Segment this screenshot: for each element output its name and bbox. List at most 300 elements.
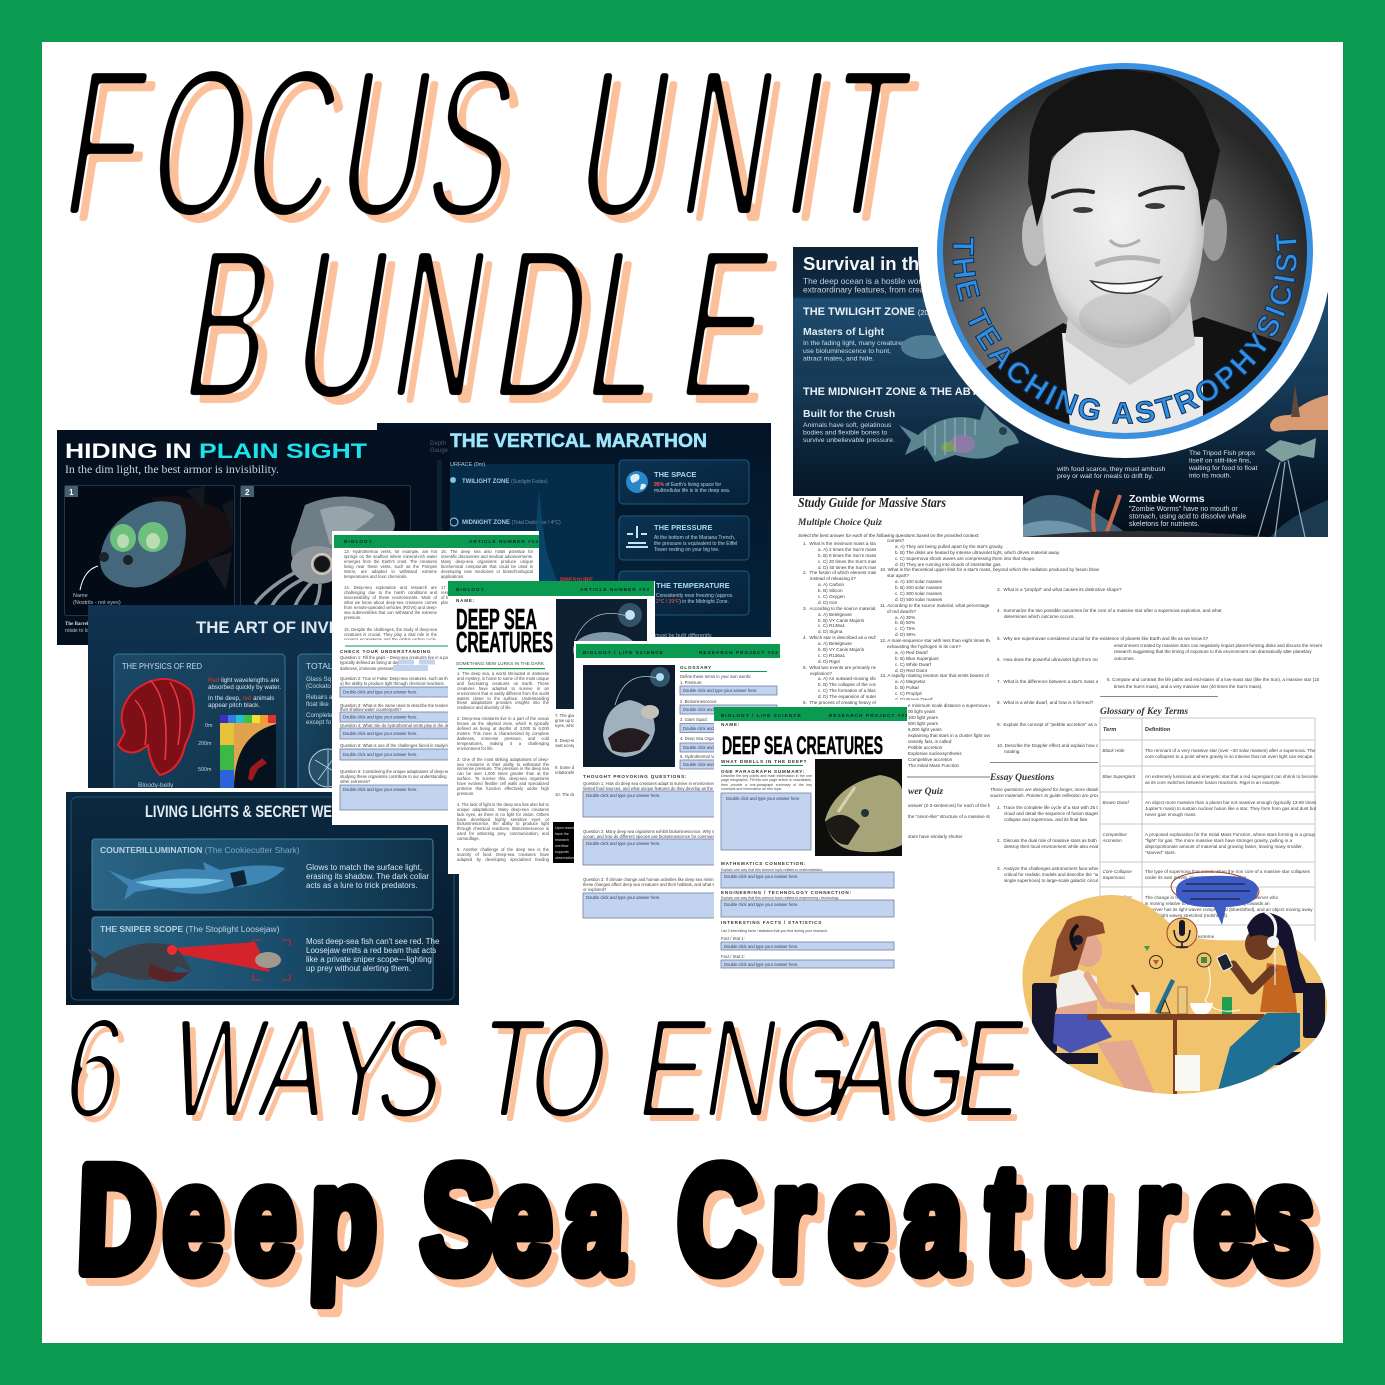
speech bubble	[1170, 869, 1260, 925]
article paragraphs: 3. One of the most striking adaptations of deep-sea creatures is their ability to withstand the immense pressure. The pressure in the deep sea can be over 1,000 times greater than at the surface. To survive this, deep-sea organisms have evolved flexible cell walls and specialized proteins that function effectively under high pressure.	[457, 757, 549, 796]
multiple choice column 2: d. D) 500 solar masses	[895, 597, 942, 602]
connection sections: Double click and type your answer here.	[724, 902, 798, 907]
physics text: In the deep, red animals	[208, 695, 274, 702]
article paragraphs: 1. The deep sea, a world shrouded in darkness and mystery, is home to some of the most unique and fascinating creatures on Earth. These creatures have adapted to survive in an environment that is vastly different from the sunlit waters closer to the surface. Understanding these adaptations provides insights into the resilience and diversity of life.	[457, 672, 549, 710]
glossary table: Supernova	[1102, 875, 1125, 880]
quiz answers continuation: Explosive nucleosynthesis	[908, 751, 962, 756]
depth absorption chart: 0m	[205, 723, 213, 729]
multiple choice column 1: d. D) Sigma	[818, 629, 842, 634]
shirt	[1062, 333, 1203, 440]
short answer questions: 9. Explain the concept of "pebble accretion" as a n	[997, 722, 1101, 727]
second column peek: 10. The deep	[555, 792, 580, 797]
second column peek: 7. The giant squid	[555, 713, 589, 718]
multiple choice column 2: comets?	[887, 538, 904, 543]
twilight zone section: attract mates, and hide.	[803, 356, 874, 362]
essay questions: Essay Questions	[990, 773, 1054, 783]
document page: research project with glossary: BIOLOGY / LIFE SCIENCE	[583, 650, 664, 655]
summary instructions: Describe the key points and main information in the one page infographic. Fill this one page article is unavailable, then provide a one-paragraph summary of the key concepts and information on this topic.	[721, 774, 812, 791]
glossary: 3. Giant Squid:	[680, 717, 708, 722]
heading: deep sea creatures: Deep Sea Creatures	[75, 1140, 1317, 1303]
second column peek: 9. Some deep	[555, 765, 582, 770]
marathon title: THE VERTICAL MARATHON	[450, 431, 707, 452]
icon: green heart	[1144, 946, 1150, 951]
glossary: 1. Pressure:	[680, 680, 703, 685]
essay questions: destroy their local environment while also enabli	[1004, 844, 1102, 849]
article paragraphs: 4. The lack of light in the deep sea has also led to unique adaptations. Many deep-sea creatures lack eyes, as there is no light for vision. Others have developed highly sensitive eyes or bioluminescence, the ability to produce light through chemical reactions. Bioluminescence is used for attracting prey, communication, and camouflage.	[457, 802, 549, 841]
eyes	[1073, 207, 1093, 213]
multiple choice column 2: d. D) Brown Dwarf	[895, 697, 933, 702]
essay questions 4 and 5: environment created by massive stars can negatively impact planet-forming disks and discuss the recent	[1114, 643, 1323, 648]
connection sections: INTERESTING FACTS / STATISTICS	[721, 920, 822, 925]
image card 1: barreleye fish	[64, 486, 234, 616]
multiple choice column 2: c. C) Proplyd	[895, 691, 922, 696]
fact card: the temperature	[619, 571, 749, 615]
neck	[1065, 300, 1195, 385]
multiple choice column 2: b. B) 50%	[895, 620, 915, 625]
multiple choice column 1: a. A) Betelgeuse	[818, 612, 852, 617]
glossary table: The type of supernova that occurs when the iron core of a massive star collapses	[1145, 869, 1311, 874]
multiple choice column 1: 1. What is the minimum mass a star	[803, 541, 876, 546]
hand with eiffel tower	[1270, 385, 1328, 432]
document page: research project what dwells in the deep: ONE PARAGRAPH SUMMARY:	[721, 769, 805, 774]
check your understanding questions: Question 4: What role do hydrothermal vents play in the deep sea?	[340, 723, 465, 728]
second column peek: 8. Deep-sea	[555, 738, 578, 743]
document page: article with title deep sea creatures: overflow	[555, 844, 569, 848]
yellow blob	[1022, 895, 1327, 1094]
document page: study guide continuation: the "onion-like" structure of a massive star	[908, 814, 994, 819]
zone labels: URFACE (0m)	[450, 462, 485, 468]
zone labels	[450, 462, 561, 526]
connection sections: ENGINEERING / TECHNOLOGY CONNECTION:	[721, 890, 852, 895]
short answer questions	[997, 587, 1222, 754]
check your understanding questions: Double click and type your answer here.	[343, 714, 417, 720]
document page: research project what dwells in the deep: RESEARCH PROJECT #03	[829, 713, 907, 718]
document page: article with title deep sea creatures: NAME:	[456, 598, 475, 603]
table	[1087, 1014, 1265, 1020]
depth gauge label	[430, 441, 449, 454]
fact card: the space: 95% of Earth's living space for	[654, 482, 721, 488]
glossary table: under its own gravity, triggering a titanic explosion.	[1145, 875, 1248, 880]
card: counterillumination: Glows to match the surface light,	[306, 863, 422, 872]
multiple choice column 1: a. A) Carbon	[818, 582, 844, 587]
essay questions	[989, 773, 1103, 883]
document page: article with title deep sea creatures: BIOLOGY	[456, 587, 485, 592]
slide subtitle: In the dim light, the best armor is invisibility.	[65, 462, 279, 476]
fact card: the pressure: At the bottom of the Mariana Trench,	[654, 535, 735, 541]
thought provoking questions: THOUGHT PROVOKING QUESTIONS:	[583, 774, 687, 779]
multiple choice column 2: 13. A rapidly rotating neutron star that emits beams of X	[880, 673, 993, 678]
document page: study guide multiple choice: Multiple Choice Quiz	[797, 518, 882, 528]
loosejaw fish	[87, 943, 192, 980]
essay questions 4 and 5: research suggesting that the timing of exposure to this environment can dramatically alter planetary	[1114, 649, 1312, 654]
card: the sniper scope: THE SNIPER SCOPE (The Stoplight Loosejaw)	[100, 924, 280, 934]
check your understanding questions: Double click and type your answer here.	[343, 690, 417, 694]
multiple choice column 1: b. B) VY Canis Majoris	[818, 647, 864, 652]
second column peek: relationships	[555, 770, 579, 775]
zombie worms and whale scene: Zombie Worms	[1129, 493, 1205, 505]
short answer questions: 4. Summarize the two possible outcomes for the core of a massive star after a supernova explosion, and what	[997, 608, 1222, 613]
thought provoking questions: or explored?	[583, 887, 607, 892]
document page: research project what dwells in the deep: BIOLOGY / LIFE SCIENCE	[721, 713, 802, 718]
document page: article with title deep sea creatures: have the	[555, 832, 569, 836]
panel: the art of invisibility slide	[88, 605, 348, 788]
worksheet title	[456, 604, 553, 659]
glossary: Double click and	[683, 762, 714, 767]
card: counterillumination: COUNTERILLUMINATION (The Cookiecutter Shark)	[100, 845, 300, 855]
multiple choice column 2: c. C) 300 solar masses	[895, 591, 942, 596]
quiz answers continuation: 6,000 light years	[908, 727, 942, 732]
multiple choice column 1: a. A) An outward-moving shc	[818, 676, 876, 681]
multiple choice column 1: b. B) VY Canis Majoris	[818, 618, 864, 623]
card: total transparency: float like	[306, 701, 329, 708]
multiple choice column 1: c. C) R136a1	[818, 623, 845, 628]
chairs	[1032, 983, 1057, 1053]
essay questions: cloud and detail the sequence of fusion stages	[1004, 811, 1099, 816]
card: total transparency: except fo	[306, 719, 332, 726]
document page: article page with check your understanding: ARTICLE NUMBER #03	[469, 539, 539, 544]
glossary: Define these terms in your own words:	[680, 674, 751, 679]
multiple choice column 2: b. B) The disks are heated by intense ultraviolet light, which drives material away.	[895, 550, 1060, 555]
deep sea fish photo	[815, 759, 902, 856]
ears	[1022, 204, 1046, 266]
card: total transparency: TOTAL	[306, 661, 333, 671]
short answer questions: 8. What is a white dwarf, and how is it formed?	[997, 700, 1094, 705]
icon: podcast mic	[1167, 918, 1197, 948]
thought provoking questions: Question 2: Many deep sea organisms exhibit bioluminescence. Why might creatures	[583, 829, 741, 834]
connection sections: Fact / Stat 1:	[721, 936, 745, 941]
multiple choice column 2: b. B) 200 solar masses	[895, 585, 942, 590]
slide title: LIVING LIGHTS & SECRET WE	[145, 803, 332, 821]
glossary table: Core-Collapse	[1102, 869, 1132, 874]
woman right upper body	[1217, 912, 1310, 1013]
article paragraphs: 2. Deep-sea creatures live in a part of the ocean known as the abyssal zone, which is typically defined as being at depths of 3,000 to 6,000 meters. This zone is characterized by complete darkness, immense pressure, and cold temperatures, making it a challenging environment for life.	[457, 716, 549, 751]
fact card: the pressure: THE PRESSURE	[654, 523, 712, 532]
fact card: the pressure: the pressure is equivalent to the Eiffel	[654, 541, 737, 547]
zombie worms and whale scene: skeletons for nutrients.	[1129, 521, 1199, 528]
essay questions 4 and 5	[1107, 643, 1323, 689]
connection sections: Fact / Stat 2:	[721, 954, 745, 959]
zombie worms and whale scene: "Zombie Worms" have no mouth or	[1129, 506, 1238, 513]
physics text	[208, 677, 281, 709]
fact card: the temperature: THE TEMPERATURE	[656, 581, 730, 590]
connection sections: Double click and type your answer here.	[724, 962, 798, 967]
multiple choice column 2: a. A) Magnetar	[895, 679, 925, 684]
multiple choice column 2: star apart?	[887, 573, 909, 578]
worksheet title: CREATURES	[456, 627, 553, 659]
short answer questions: determines which outcome occurs.	[1004, 614, 1075, 619]
essay questions: 3. Analyze the challenges astronomers face when	[997, 866, 1100, 871]
tripod fish	[1188, 438, 1316, 537]
glossary	[680, 665, 777, 769]
fact card: the space	[619, 460, 749, 504]
twilight zone section: THE TWILIGHT ZONE (200 – 1000m)	[803, 306, 967, 318]
fact card: the space: THE SPACE	[654, 470, 696, 479]
depth absorption chart	[198, 715, 276, 788]
glossary table: Definition	[1145, 727, 1171, 733]
quiz answers continuation: 00 light years	[908, 709, 936, 714]
thought provoking questions: Question 3: If climate change and human activities like deep sea mining continue to	[583, 877, 738, 882]
twilight zone section	[803, 306, 967, 362]
glossary table: A proposed explanation for the Initial Mass Function, where stars forming in a group	[1145, 832, 1316, 837]
jacket	[986, 317, 1282, 433]
glossary table: Term	[1103, 727, 1116, 733]
glossary table: Accretion	[1102, 838, 1122, 843]
card: total transparency: (Cockato	[306, 683, 331, 690]
short answer questions: 7. What is the difference between a star's mass an	[997, 679, 1101, 684]
glossary table: Brown Dwarf	[1102, 800, 1130, 805]
multiple choice column 1: c. C) Oxygen	[818, 594, 845, 599]
short answer questions: 3. What is a "proplyd" and what causes its distinctive shape?	[997, 587, 1122, 592]
glossary table: observer has its light waves compressed (blueshifted), and an object moving away	[1145, 907, 1313, 912]
essay questions 4 and 5: times the Sun's mass), and a very massive star (40 times the Sun's mass).	[1114, 684, 1263, 689]
glossary table: Black Hole	[1102, 748, 1125, 753]
smile	[1091, 277, 1161, 293]
zombie worms and whale scene: stomach, using acid to dissolve whale	[1129, 514, 1246, 520]
second column peek: grow up to 43 feet	[555, 718, 589, 723]
shopping bag	[1175, 1055, 1200, 1091]
check your understanding questions: studying these organisms contribute to our understanding of life in the	[340, 774, 470, 779]
quiz answers continuation: 600 light years	[908, 721, 939, 726]
multiple choice column 2: exhausting the hydrogen in its core?	[887, 644, 961, 649]
card: the sniper scope: like a private sniper scope—lighting	[306, 955, 432, 964]
shark	[108, 862, 285, 900]
document page: research project what dwells in the deep	[714, 707, 907, 968]
quiz answers continuation: onsistly fast, is called:	[908, 739, 952, 744]
glossary: Double click and	[683, 745, 714, 750]
worksheet title: DEEP SEA	[456, 604, 537, 636]
fact card: the temperature: 2°C / 39°F) in the Midnight Zone.	[656, 599, 729, 605]
quiz answers continuation: Pebble accretion	[908, 745, 943, 750]
article column 2: 17. The deep sea is also important for scientific research and helps us understand the evolution of life, the limits of survival and the health of the planet.	[441, 585, 533, 605]
multiple choice column 2: 12. A main-sequence star with less than eight times the	[880, 638, 992, 643]
midnight zone section: bodies and flexible bones to	[803, 430, 887, 436]
thought provoking questions: ocean, and how do different species use bioluminescence for communication, hunting	[583, 834, 742, 839]
multiple choice column 1: d. D) Iron	[818, 600, 837, 605]
panel: survival in the deep slide: The deep ocean is a hostile world	[803, 276, 928, 286]
depth absorption chart: 500m	[198, 767, 212, 773]
fact card: the pressure: Tower resting on your big toe.	[654, 547, 720, 553]
glossary table: as its core switches between fusion reactions. Rigel is an example.	[1145, 780, 1281, 785]
thought provoking questions: limited food sources, and what unique features do they develop as the water pressure	[583, 786, 742, 791]
second column peek: vast ecosystems	[555, 743, 586, 748]
essay questions: 2. Discuss the dual role of massive stars as both c	[997, 838, 1101, 843]
glossary table: The change in frequency of a wave in relation to an observer who	[1145, 895, 1278, 900]
glossary table: "fight" for gas. The more massive stars have stronger gravity, pulling in a	[1145, 838, 1293, 843]
icon: heart reaction	[1150, 956, 1162, 968]
anglerfish image	[556, 599, 647, 709]
glossary heading: Glossary of Key Terms	[1100, 707, 1188, 717]
bloody-belly comb jelly	[118, 679, 194, 775]
multiple choice column 1: 2. The fusion of which element main	[803, 570, 876, 575]
scavenger text: with food scarce, they must ambush	[1056, 466, 1166, 473]
check your understanding questions: Question 2: True or False: Deep-sea creatures, such as the giant squid, have	[340, 676, 484, 681]
multiple choice column 2: a. A) Red Dwarf	[895, 650, 928, 655]
multiple choice column 1: instead of releasing it?	[810, 576, 856, 581]
summary answer box	[721, 793, 811, 850]
glossary table: The remnant of a very massive star (over ~20 solar masses) after a supernova. The	[1145, 748, 1316, 753]
document page: article with title deep sea creatures: observations	[555, 856, 576, 860]
multiple choice column 2: b. B) Blue Supergiant	[895, 656, 939, 661]
check your understanding questions: darkness, immense pressure, and	[340, 666, 404, 671]
multiple choice column 1: 3. According to the source material,	[803, 606, 876, 611]
check your understanding questions: typically defined as being at depths of	[340, 660, 411, 665]
check your understanding questions: Double click and type your answer here.	[343, 731, 417, 736]
article column 2	[441, 550, 533, 640]
check your understanding questions	[340, 649, 493, 810]
essay questions: collapse and supernova, and its final fate.	[1004, 817, 1089, 822]
document page: research project what dwells in the deep: NAME:	[721, 722, 740, 727]
multiple choice column 1: 5. What two events are primarily res	[803, 665, 876, 670]
multiple choice column 2: d. D) Red Giant	[895, 668, 927, 673]
short answer questions: rotating.	[1004, 749, 1021, 754]
multiple choice column 2: c. C) Supernova shock waves are compressing them into that shape.	[895, 556, 1035, 561]
document page: article with title deep sea creatures: research	[555, 838, 569, 842]
essay questions: single supernova) to large-scale galactic circulati	[1004, 878, 1103, 883]
check your understanding questions: Double click and type your answer here.	[343, 752, 417, 757]
thought provoking questions: Double click and type your answer here.	[586, 793, 660, 798]
table items	[1131, 966, 1240, 1014]
check your understanding questions: Question 3: What is the name used to describe the tendency of	[340, 703, 458, 708]
document page: research project with glossary	[574, 641, 780, 918]
essay questions 4 and 5: outcomes.	[1114, 656, 1135, 661]
image card 2: glass squid	[240, 486, 410, 616]
multiple choice column 2: d. D) 90%	[895, 632, 915, 637]
tripod fish: waiting for food to float	[1188, 465, 1257, 472]
caption: rotate to look up	[65, 628, 101, 634]
depth gauge label: Depth	[430, 441, 446, 447]
check your understanding questions: Question 6: Considering the unique adaptations of deep-sea creatures, how might	[340, 769, 493, 774]
nose and cheeks shade	[1110, 240, 1140, 246]
card: total transparency: Rebairs a	[306, 694, 333, 701]
multiple choice column 1: explosion?	[810, 671, 832, 676]
life from death heading clipped: Life from Death	[803, 496, 880, 508]
red beam	[173, 942, 270, 972]
glossary: Double click and type your answer here.	[683, 688, 757, 693]
check your understanding questions: a) the ability to produce light through chemical reactions.	[340, 681, 445, 686]
thought provoking questions: Double click and type your answer here.	[586, 841, 660, 846]
midnight zone section: Built for the Crush	[803, 408, 895, 420]
tripod fish: itself on stilt-like fins,	[1189, 458, 1251, 464]
document page: study guide multiple choice: Select the best answer for each of the following questions based on the provided context:	[798, 533, 980, 538]
card: counterillumination: acts as a lure to trick predators.	[306, 881, 418, 890]
midnight zone section	[803, 386, 993, 444]
face	[1043, 125, 1205, 348]
eiffel tower outline	[520, 490, 560, 590]
twilight zone section: use bioluminescence to hunt,	[803, 348, 891, 355]
connection sections: List 2 interesting facts / statistics that you find during your research:	[721, 929, 828, 933]
hair	[1028, 68, 1220, 227]
scavenger text	[1056, 466, 1166, 480]
glossary table: Competitive	[1102, 832, 1127, 837]
connection sections: MATHEMATICS CONNECTION:	[721, 861, 806, 866]
glossary table: A massive star where the extreme	[1145, 934, 1215, 939]
document page: glossary of key terms	[1098, 643, 1323, 941]
physics text: appear pitch black.	[208, 702, 260, 709]
multiple choice column 2: 11. According to the source material, what percentage o	[880, 603, 993, 608]
short answer questions: 10. Describe the Doppler effect and explain how can	[997, 743, 1104, 748]
panel: the vertical marathon slide	[377, 423, 771, 637]
multiple choice column 1: c. C) R136a1	[818, 653, 845, 658]
glossary table: Doppler Effect	[1102, 895, 1132, 900]
document page: short answer and essay questions	[990, 587, 1222, 883]
tripod fish: into its mouth.	[1189, 472, 1231, 480]
card: the sniper scope: Loosejaw emits a red beam that acts	[306, 946, 436, 955]
document page: study guide continuation	[895, 700, 995, 839]
document page: study guide continuation: stars have similarly shorter	[908, 834, 963, 839]
glossary table: disproportionate amount of material and growing faster, leaving many smaller,	[1145, 844, 1303, 849]
multiple choice column 2: a. A) They are being pulled apart by the star's gravity.	[895, 544, 1003, 549]
glossary table: "starved" stars.	[1145, 850, 1176, 855]
quiz answers continuation: Competitive accretion	[908, 757, 953, 762]
card: total transparency	[298, 654, 358, 794]
connection sections: Explain one way that this science topic relates to engineering / technology.	[721, 896, 839, 900]
document page: study guide continuation: answer (2-3 sentences) for each of the fo	[908, 803, 992, 808]
glossary table: An object more massive than a planet but not massive enough (typically 13-80 times	[1145, 800, 1317, 805]
check your understanding questions: Question 5: What is one of the challenges faced in studying deep-sea	[340, 743, 469, 748]
woman right lower body	[1217, 1013, 1300, 1094]
glossary table: Blue Supergiant	[1102, 774, 1136, 779]
document page: article page with check your understanding	[332, 531, 539, 825]
zone labels: MIDNIGHT ZONE (Total Darkness / 4°C)	[462, 520, 561, 526]
multiple choice column 1: a. A) Betelgeuse	[818, 641, 852, 646]
woman left	[1050, 916, 1155, 1094]
document page: article with title deep sea creatures: Upon reaching	[555, 826, 578, 830]
anglerfish image	[583, 665, 675, 767]
multiple choice column 2: c. C) White Dwarf	[895, 662, 931, 667]
depth gauge label: Gauge	[430, 448, 449, 454]
card: the sniper scope: up prey without alerting them.	[306, 964, 411, 973]
twilight zone section: Masters of Light	[803, 326, 885, 338]
slide heading: Survival in the	[803, 253, 929, 274]
fact card: the space: multicellular life is in the deep sea.	[654, 488, 730, 494]
multiple choice column 2: a. A) 100 solar masses	[895, 579, 942, 584]
connection sections: Double click and type your answer here.	[724, 944, 798, 949]
multiple choice column 2: d. D) They are running into clouds of interstellar gas.	[895, 562, 1002, 567]
glossary: 2. Bioluminescence:	[680, 699, 717, 704]
quiz answers continuation: The Initial Mass Function	[908, 763, 960, 768]
depth absorption chart: 200m	[198, 741, 212, 747]
glossary: 4. Deep Sea Organism:	[680, 736, 724, 741]
document page: research project with glossary: RESEARCH PROJECT #03	[699, 650, 779, 655]
connection sections	[721, 861, 894, 968]
check your understanding questions: Question 1: Fill the gaps – Deep-sea creatures live in a part of the ocean	[340, 655, 475, 660]
fact card: the temperature: Consistently near freezing (approx.	[656, 593, 734, 599]
multiple choice column 1: a. A) 2 times the Sun's mass	[818, 547, 876, 552]
thought provoking questions	[583, 774, 773, 918]
connection sections: Explain one way that this science topic relates to math/statistics.	[721, 868, 823, 872]
panel: hiding in plain sight slide	[57, 430, 450, 645]
image card 1: barreleye fish: (Nostrils - not eyes)	[73, 600, 121, 606]
scavenger text: prey or wait for meals to drift by.	[1057, 473, 1153, 480]
essay questions 4 and 5: 5. Compare and contrast the life paths and end-states of a low-mass star (like the Sun), a massive star (15	[1107, 677, 1320, 682]
multiple choice column 2	[880, 538, 1102, 782]
essay questions: critical for realistic models and describe the "uni	[1004, 872, 1101, 877]
card: the physics of red	[114, 654, 285, 794]
short answer questions: 6. How does the powerful ultraviolet light from mas	[997, 657, 1102, 662]
card: counterillumination: erasing its shadow. The dark collar	[306, 872, 429, 881]
black callout	[553, 822, 575, 863]
icon: teaching astrophysicist portrait badge	[918, 63, 1328, 458]
check your understanding questions: other extremes?	[340, 779, 371, 784]
document page: study guide multiple choice	[793, 496, 1099, 711]
quiz answers continuation	[908, 703, 998, 768]
essay questions: 1. Trace the complete life cycle of a star with 25 tim	[997, 805, 1103, 810]
card: the physics of red: THE PHYSICS OF RED	[122, 661, 202, 671]
multiple choice column 2: a. A) 30%	[895, 615, 915, 620]
essay questions: These questions are designed for longer, more detailed	[990, 787, 1103, 792]
multiple choice column 1: b. B) Silicon	[818, 588, 843, 593]
check your understanding questions: CHECK YOUR UNDERSTANDING	[340, 649, 431, 654]
